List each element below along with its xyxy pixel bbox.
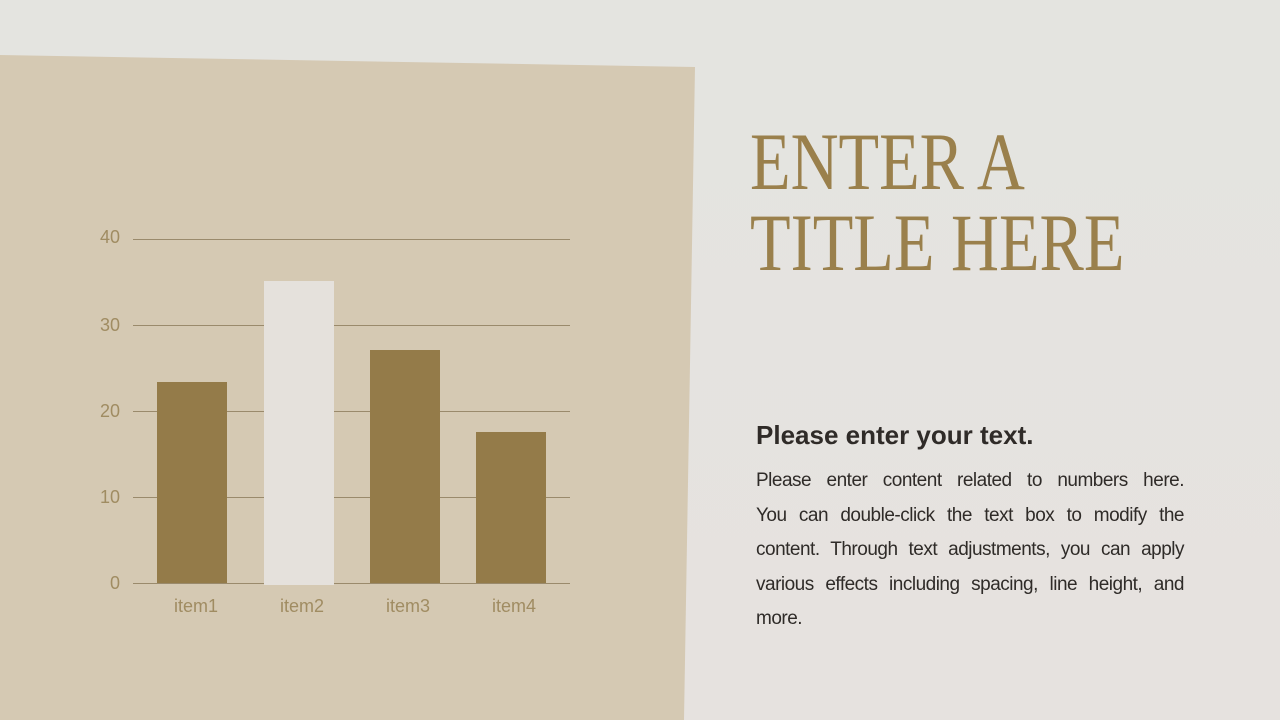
bar chart: 40: [100, 227, 120, 247]
bar: item2: [264, 281, 334, 585]
body text: various effects including spacing, line height, and: [756, 574, 1184, 594]
title: TITLE HERE: [750, 197, 1124, 288]
bar chart: 30: [100, 315, 120, 335]
title: [750, 116, 1124, 288]
bar chart: [100, 227, 120, 593]
bar: item3: [370, 350, 440, 583]
bar chart: 20: [100, 401, 120, 421]
x labels: item1: [174, 596, 218, 616]
body text: [756, 470, 1184, 629]
bar chart: 0: [110, 573, 120, 593]
bar chart: 10: [100, 487, 120, 507]
x labels: item3: [386, 596, 430, 616]
x labels: item2: [280, 596, 324, 616]
x labels: [174, 596, 536, 616]
body text: You can double-click the text box to modify the: [756, 504, 1184, 526]
x labels: item4: [492, 596, 536, 616]
subheading: Please enter your text.: [756, 420, 1033, 450]
body text: more.: [756, 608, 802, 629]
title: ENTER A: [750, 116, 1025, 207]
bar: item4: [476, 432, 546, 583]
body text: content. Through text adjustments, you can apply: [756, 539, 1184, 560]
bar: item1: [157, 382, 227, 583]
body text: Please enter content related to numbers here.: [756, 470, 1184, 491]
